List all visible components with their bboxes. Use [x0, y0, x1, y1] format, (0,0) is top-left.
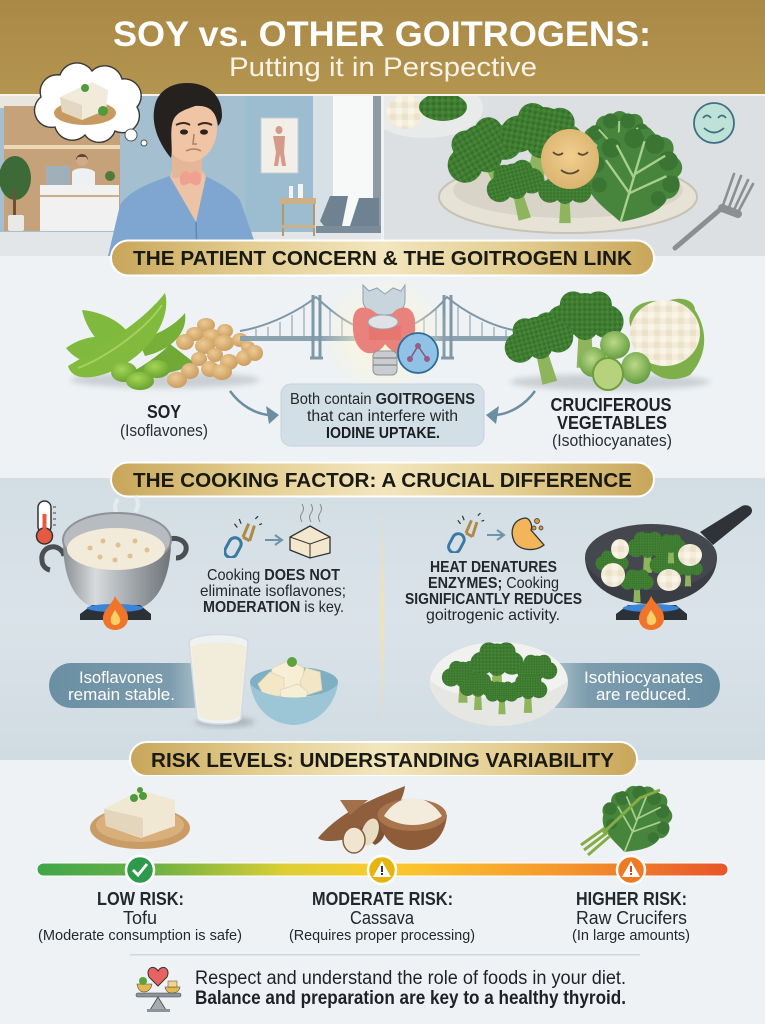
illustration: raw kale [581, 774, 681, 864]
heading pill: cooking factor [111, 462, 654, 496]
broccoli on plate [448, 103, 592, 224]
illustration: cassava and flour [318, 786, 447, 853]
text: low risk: Tofu [123, 908, 157, 928]
potted plant [0, 156, 31, 231]
subtitle: Putting it in Perspective [229, 52, 537, 82]
icon: chain to tofu cube [223, 504, 330, 560]
title: SOY vs. OTHER GOITROGENS: [113, 15, 651, 54]
heading pill: risk levels [130, 742, 637, 776]
marker: low [126, 856, 154, 884]
text: crucifer cooking note: HEAT DENATURES [430, 559, 557, 576]
icon: thermometer [36, 501, 56, 544]
heading pill: cooking factor: THE COOKING FACTOR: A CRUCIAL DIFFERENCE [133, 469, 632, 492]
heading pill: patient concern: THE PATIENT CONCERN & THE GOITROGEN LINK [133, 247, 632, 270]
pill: isoflavones remain stable [49, 663, 200, 708]
text: soy cooking note: Cooking DOES NOT [207, 567, 340, 584]
illustration: cruciferous vegetables [498, 291, 710, 392]
callout: goitrogens: Both contain GOITROGENS [290, 391, 475, 408]
band under photos [0, 256, 765, 478]
closing message: Respect and understand the role of foods in your diet. [195, 968, 626, 989]
text: moderate risk: (Requires proper processing) [289, 927, 475, 944]
text: low risk: LOW RISK: [97, 889, 184, 909]
text: soy cooking note: eliminate isoflavones; [200, 583, 346, 600]
illustration: bowl of broccoli [430, 642, 568, 726]
illustration: soy pods and beans [66, 293, 263, 390]
pill: isothiocyanates reduced: Isothiocyanates [584, 668, 703, 687]
callout: goitrogens [281, 384, 484, 446]
illustration: thyroid with molecule [320, 273, 450, 397]
smiley icon [694, 103, 734, 143]
illustration: glass of soy milk [189, 634, 255, 727]
text: higher risk [572, 889, 690, 944]
icon: chain to enzyme [446, 513, 544, 555]
calm face [541, 129, 599, 189]
heading pill: patient concern [111, 240, 654, 276]
label: soy: SOY [147, 402, 181, 422]
text: crucifer cooking note: ENZYMES; Cooking [428, 575, 559, 592]
text: soy cooking note [200, 567, 346, 616]
text: low risk: (Moderate consumption is safe) [38, 927, 242, 944]
photo: worried patient in clinic [0, 63, 381, 256]
fork [675, 174, 753, 248]
text: higher risk: HIGHER RISK: [576, 889, 687, 909]
thought bubble with tofu [35, 63, 147, 146]
pill: isothiocyanates reduced: are reduced. [596, 685, 691, 704]
marker: moderate [368, 856, 396, 884]
label: cruciferous vegetables: (Isothiocyanates) [552, 431, 672, 450]
illustration: right burner flame [616, 596, 687, 630]
header banner [0, 0, 765, 96]
arrow: soy to callout [230, 391, 279, 424]
illustration: tofu on plate [90, 787, 190, 849]
marker: higher [617, 856, 645, 884]
waiting chairs [316, 196, 381, 233]
label: soy: (Isoflavones) [120, 421, 208, 440]
title [113, 15, 651, 82]
illustration: left burner flame [80, 596, 151, 630]
text: soy cooking note: MODERATION is key. [203, 599, 344, 616]
illustration: pot of soy milk [42, 496, 186, 608]
risk background [0, 760, 765, 1024]
label: soy [120, 402, 208, 440]
kale on plate [584, 111, 682, 222]
text: crucifer cooking note [405, 559, 582, 624]
text: moderate risk: MODERATE RISK: [312, 889, 453, 909]
anatomy poster [261, 118, 298, 173]
pill: isoflavones remain stable: remain stable. [68, 685, 175, 704]
callout: goitrogens: that can interfere with [307, 408, 458, 425]
label: cruciferous vegetables: CRUCIFEROUS [550, 395, 672, 415]
centre divider [380, 505, 384, 727]
shelf [280, 184, 316, 236]
arrow: vegetables to callout [486, 391, 535, 424]
closing message: Balance and preparation are key to a healthy thyroid. [195, 988, 626, 1009]
text: moderate risk: Cassava [350, 908, 415, 928]
reception desk [40, 154, 119, 231]
illustration: wok with broccoli and cauliflower [585, 505, 752, 604]
label: cruciferous vegetables [550, 395, 672, 450]
plate [439, 161, 697, 233]
callout: goitrogens: IODINE UPTAKE. [326, 425, 440, 442]
pill: isothiocyanates reduced [555, 663, 720, 708]
text: crucifer cooking note: SIGNIFICANTLY REDUCES [405, 591, 582, 608]
woman [108, 83, 254, 256]
photo: cruciferous plate [384, 96, 765, 256]
text: crucifer cooking note: goitrogenic activity. [426, 607, 560, 624]
side plate [384, 96, 483, 138]
heading pill: risk levels: RISK LEVELS: UNDERSTANDING VARIABILITY [151, 749, 614, 772]
molecule [398, 333, 438, 373]
text: higher risk: (In large amounts) [572, 927, 690, 944]
closing message [195, 968, 626, 1009]
text: moderate risk [289, 889, 475, 944]
pill: isoflavones remain stable: Isoflavones [79, 668, 163, 687]
text: higher risk: Raw Crucifers [576, 908, 687, 928]
icon: balance scale with heart [136, 967, 181, 1012]
illustration: bridge [240, 295, 525, 358]
risk gradient bar [37, 856, 728, 884]
illustration: bowl of tofu [250, 657, 338, 725]
label: cruciferous vegetables: VEGETABLES [557, 413, 667, 433]
text: low risk [38, 889, 242, 944]
